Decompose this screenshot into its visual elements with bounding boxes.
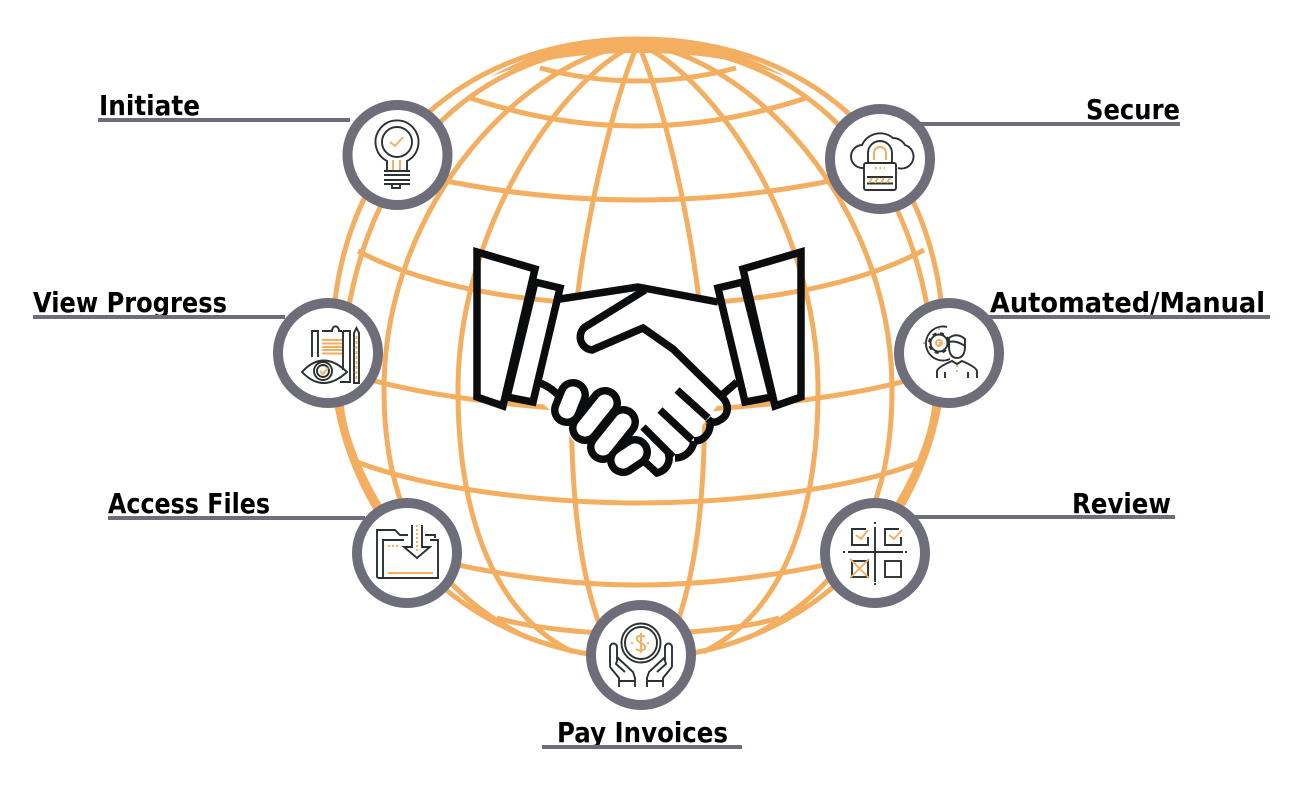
node: Review checklist grid <box>825 503 925 603</box>
label: Access Files: Access Files <box>108 488 270 520</box>
label: Initiate: Initiate <box>99 90 200 122</box>
label: Secure: Secure <box>1086 94 1180 126</box>
node: Automated/Manual gear and person <box>899 303 999 403</box>
label: Pay Invoices: Pay Invoices <box>557 717 728 749</box>
label: Review: Review <box>1072 488 1171 520</box>
node: Secure cloud lock <box>830 109 930 209</box>
node: View Progress clipboard and eye <box>278 303 378 403</box>
node: Initiate lightbulb <box>348 105 448 205</box>
label: Automated/Manual: Automated/Manual <box>990 287 1265 319</box>
node: Access Files folder <box>357 503 457 603</box>
node: Pay Invoices coin and hands <box>591 605 691 705</box>
globe wireframe <box>332 37 944 662</box>
icon: handshake <box>477 252 801 490</box>
label: View Progress: View Progress <box>33 287 227 319</box>
